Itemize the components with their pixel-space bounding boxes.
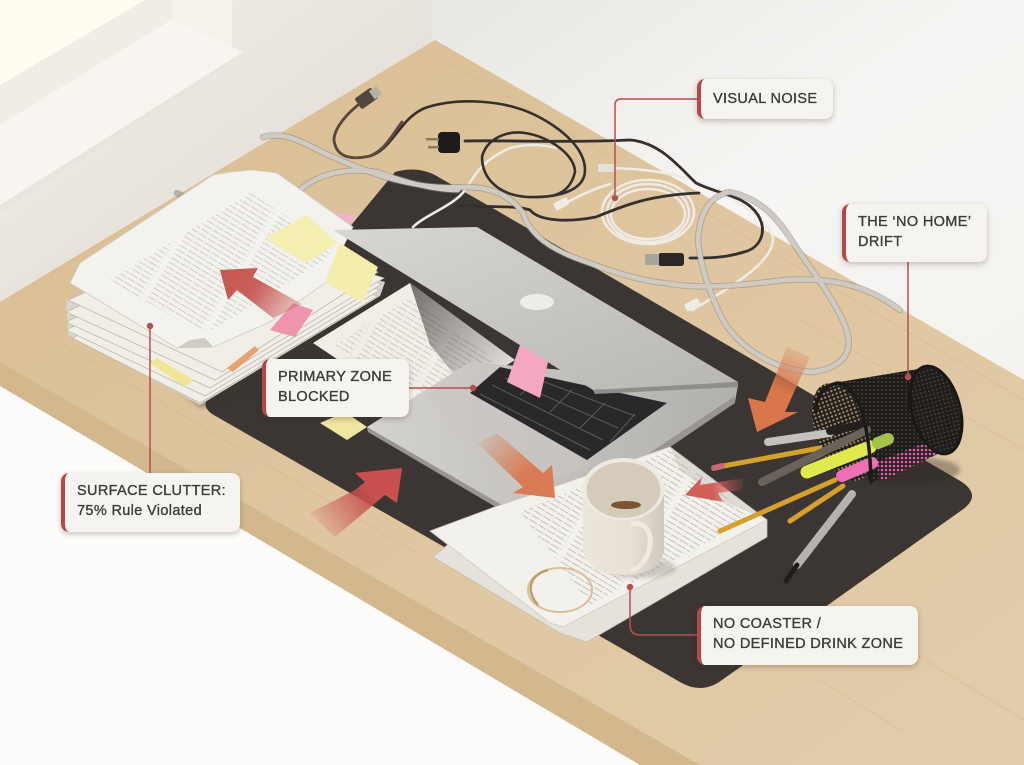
arrow: toward mug: [685, 477, 744, 502]
visual noise leader: [615, 99, 697, 197]
yellow note under laptop: [320, 412, 367, 440]
arrow: toward laptop centre: [477, 433, 555, 498]
sticky notes: [265, 215, 338, 263]
arrow: left toward papers: [220, 268, 302, 318]
white coil: [413, 145, 773, 310]
callout: no coaster: NO DEFINED DRINK ZONE: [713, 636, 903, 652]
pen holder and pens: [714, 360, 971, 581]
cable tangle: [177, 101, 900, 372]
callout: surface clutter: 75% Rule Violated: [77, 503, 202, 519]
callout: no coaster: NO COASTER /: [713, 616, 821, 632]
red arrows: [220, 268, 810, 537]
cable plugs: [354, 86, 701, 312]
laptop lid: [333, 227, 738, 390]
brown cable with usb: [334, 101, 585, 197]
trackpad: [425, 370, 590, 495]
callout: primary zone blocked: [262, 359, 409, 417]
top page: [70, 170, 353, 348]
surface clutter leader: [149, 327, 151, 474]
laptop base: [367, 362, 738, 530]
no home leader: [907, 262, 909, 376]
black plug cable: [465, 140, 762, 258]
callout: surface clutter: [61, 473, 240, 532]
paper under laptop: [313, 283, 515, 418]
arrow: up from desk: [310, 468, 402, 537]
keyboard: [470, 367, 667, 460]
callout: no home drift: [842, 204, 987, 262]
callout: visual noise: VISUAL NOISE: [713, 91, 817, 107]
primary zone leader: [408, 387, 473, 389]
yellow tab: [150, 358, 193, 387]
paper stack: [66, 170, 385, 408]
window: [0, 0, 243, 213]
coffee ring: [528, 568, 592, 612]
callout: no home drift: DRIFT: [858, 234, 902, 250]
lower papers: [430, 447, 767, 642]
orange tab: [227, 346, 259, 372]
mug handle: [631, 523, 650, 569]
logo: [520, 294, 554, 310]
callout: primary zone blocked: BLOCKED: [278, 389, 350, 405]
callout: primary zone blocked: PRIMARY ZONE: [278, 369, 392, 385]
wall right: [432, 0, 1024, 400]
holder body: [833, 367, 945, 483]
grey cables: [177, 135, 900, 372]
leader lines: [148, 99, 910, 635]
pink note: [507, 345, 548, 398]
desk mat: [205, 170, 972, 688]
floor area: [0, 380, 700, 765]
callout: visual noise: [697, 79, 833, 119]
callout: no home drift: THE ‘NO HOME’: [858, 214, 971, 230]
mug: [582, 458, 676, 578]
desk front edge: [0, 362, 700, 765]
laptop: [333, 227, 738, 530]
callout: surface clutter: SURFACE CLUTTER:: [77, 483, 226, 499]
wall left: [0, 0, 432, 310]
callout: no coaster: [697, 606, 918, 665]
back pink tabs: [80, 257, 110, 272]
arrow: down toward pens: [748, 347, 810, 432]
no coaster leader: [630, 588, 697, 635]
